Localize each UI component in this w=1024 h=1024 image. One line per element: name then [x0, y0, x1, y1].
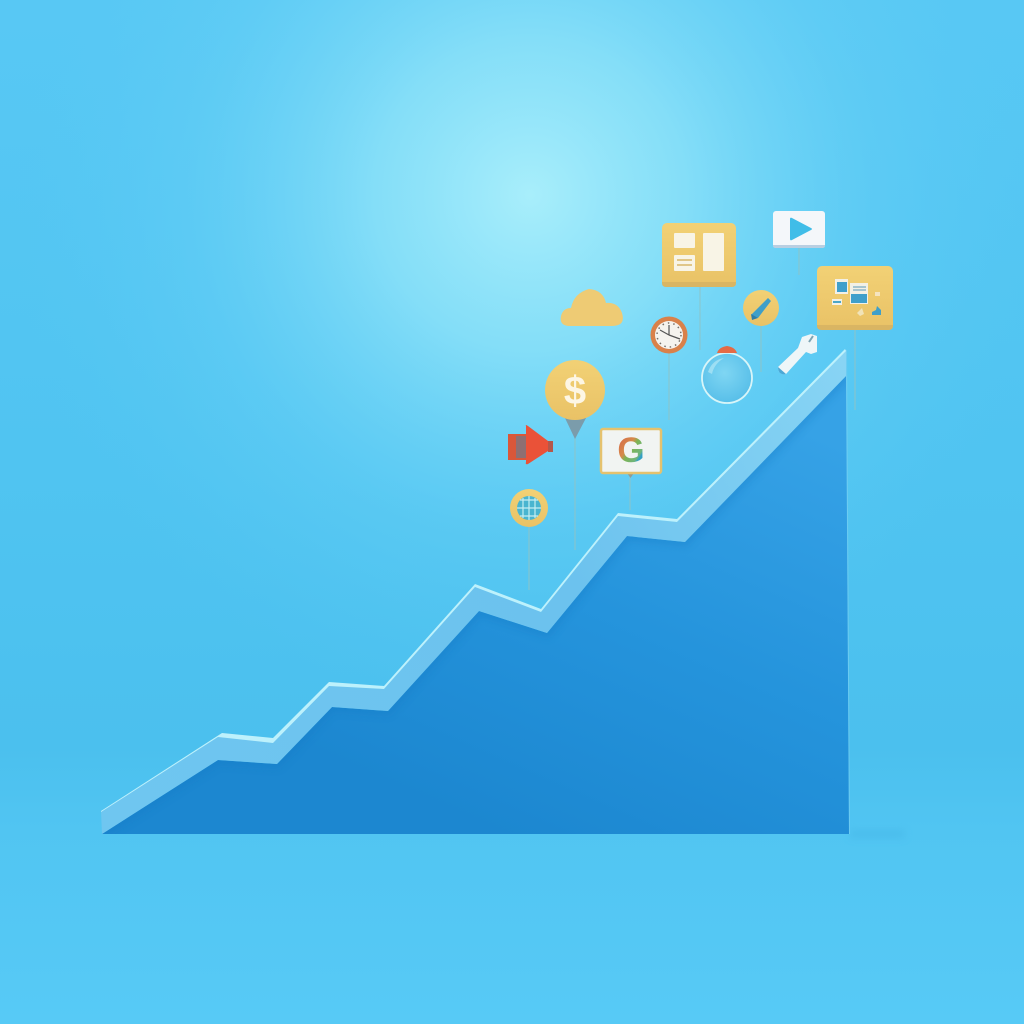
icon: wrench — [778, 334, 817, 374]
icon: clock pin — [650, 316, 688, 420]
chart wall — [102, 376, 849, 834]
icon: dollar balloon — [545, 360, 605, 550]
shadow under band — [591, 378, 845, 580]
icon: dollar balloon: $ — [564, 369, 586, 413]
rising staircase area chart — [101, 349, 905, 838]
chart right edge — [846, 350, 850, 834]
icon: cloud — [561, 289, 623, 326]
icon: video play card — [773, 211, 825, 275]
icon: dashboard card — [817, 266, 893, 410]
icon: globe pin — [510, 489, 548, 590]
chart highlight edge — [101, 349, 846, 812]
icon: layout card — [662, 223, 736, 350]
icon: glass orb — [702, 346, 752, 403]
icon: Google card — [601, 429, 661, 510]
chart top band — [101, 350, 846, 834]
icon: megaphone — [508, 425, 553, 464]
icon: tool badge — [743, 290, 779, 372]
floor shadow — [850, 830, 905, 838]
icon: Google card: G — [617, 431, 645, 470]
